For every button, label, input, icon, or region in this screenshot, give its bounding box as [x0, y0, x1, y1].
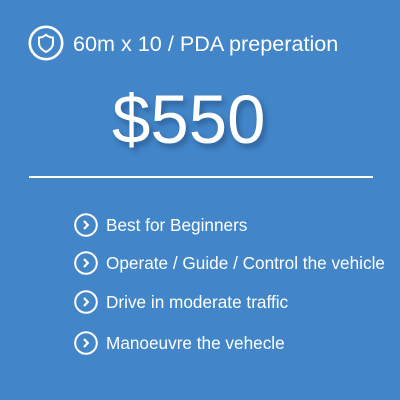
icon: shield in circle [28, 26, 64, 60]
feature: beginners: Best for Beginners [106, 214, 247, 234]
feature list [74, 213, 385, 355]
divider line [29, 176, 373, 178]
feature: traffic: Drive in moderate traffic [106, 292, 288, 312]
feature: manoeuvre: Manoeuvre the vehecle [106, 333, 285, 353]
heading: package: 60m x 10 / PDA preperation [73, 31, 338, 56]
feature: operate: Operate / Guide / Control the vehicle [106, 252, 385, 272]
feature: beginners [74, 213, 247, 237]
price: $550 [112, 81, 266, 158]
